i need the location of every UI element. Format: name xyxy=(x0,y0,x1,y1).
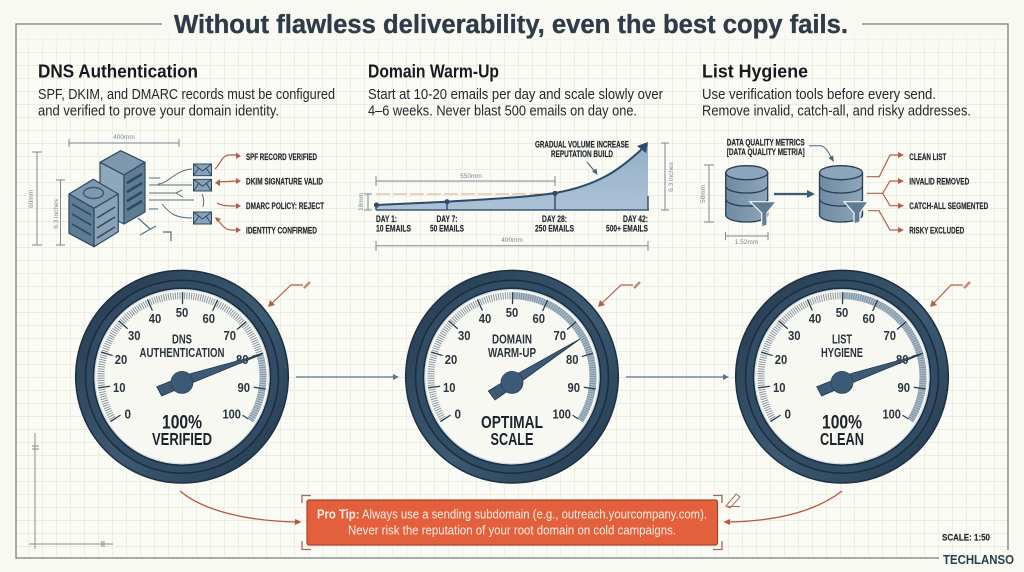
gauge title xyxy=(488,332,536,360)
curve xyxy=(376,147,644,205)
labels: server checks: SPF RECORD VERIFIED xyxy=(246,152,317,163)
scale numbers: 80 xyxy=(566,353,579,367)
gauge bezel xyxy=(406,270,618,483)
gauge value xyxy=(481,412,543,449)
dimension lines: chart: 550mm xyxy=(460,173,482,180)
scale numbers: 60 xyxy=(202,312,215,326)
chart annotation: REPUTATION BUILD xyxy=(551,149,613,160)
callout box xyxy=(307,500,718,545)
heading: DNS Authentication: DNS Authentication xyxy=(38,60,198,82)
icon: funnel left xyxy=(750,202,776,227)
needle xyxy=(157,354,262,396)
scale ticks xyxy=(431,296,593,420)
arrow: gauge 1 to gauge 2 xyxy=(296,374,399,380)
scale label: SCALE: 1:50 xyxy=(942,532,990,544)
gauge value: OPTIMAL xyxy=(481,412,543,432)
scale numbers: 0 xyxy=(454,408,461,422)
scale ticks xyxy=(761,296,923,420)
arrows: server checks xyxy=(215,152,241,233)
scale numbers xyxy=(113,306,250,422)
callout: pro tip xyxy=(302,494,740,550)
labels: hygiene outputs: INVALID REMOVED xyxy=(909,176,969,188)
scale numbers: 20 xyxy=(445,353,457,367)
scale numbers: 50 xyxy=(176,306,188,320)
arrowhead xyxy=(637,142,648,153)
day labels: 10 EMAILS xyxy=(376,224,411,234)
gauge title: DOMAIN xyxy=(492,333,532,347)
day labels: 250 EMAILS xyxy=(535,224,574,234)
labels: server checks: IDENTITY CONFIRMED xyxy=(246,226,317,236)
labels: hygiene outputs xyxy=(909,152,988,236)
dimension lines: database: 1.52mm xyxy=(735,239,758,246)
annotation: data quality metrics xyxy=(727,138,834,162)
labels: server checks: DMARC POLICY: REJECT xyxy=(246,201,324,212)
scale numbers: 40 xyxy=(809,312,821,326)
scale numbers: 100 xyxy=(882,408,901,422)
callout pointer: gauge 1 xyxy=(268,282,310,307)
gauge title: WARM-UP xyxy=(488,346,536,360)
scale numbers: 80 xyxy=(896,353,909,367)
curved arrow: gauge 1 to pro tip xyxy=(180,491,302,525)
dimension lines: chart: 18mm xyxy=(358,193,365,211)
dimension lines: server: 60mm xyxy=(28,190,35,208)
gauge value: 100% xyxy=(822,413,862,434)
heading: List Hygiene: List Hygiene xyxy=(702,60,808,82)
gauge value: CLEAN xyxy=(820,429,864,449)
arrow: gauge 2 to gauge 3 xyxy=(626,374,729,380)
panel: List hygiene text xyxy=(702,60,971,120)
scale numbers: 40 xyxy=(149,312,161,326)
title: Without flawless deliverability, even the best copy fails. xyxy=(174,11,848,39)
scale numbers: 70 xyxy=(883,329,896,343)
diagram: DNS servers and email checks xyxy=(28,134,324,247)
scale numbers: 30 xyxy=(128,329,141,343)
annotation: data quality metrics: [DATA QUALITY METRIA] xyxy=(727,147,805,158)
description: DNS Authentication xyxy=(38,87,335,120)
dimension lines: chart: 400mm xyxy=(501,237,523,244)
gauge value: VERIFIED xyxy=(152,429,212,449)
labels: server checks xyxy=(246,152,324,236)
scale numbers: 0 xyxy=(124,408,131,422)
arrows: hygiene outputs xyxy=(867,152,904,233)
gauge value: 100% xyxy=(162,413,202,434)
day labels: DAY 28: xyxy=(542,214,567,225)
gauge title: HYGIENE xyxy=(821,346,863,360)
data points xyxy=(374,191,558,208)
scale numbers: 10 xyxy=(443,381,456,395)
panel: Domain warm-up text xyxy=(368,60,663,120)
scale numbers: 30 xyxy=(788,329,801,343)
gauge title: LIST xyxy=(832,333,852,347)
heading: Domain Warm-Up: Domain Warm-Up xyxy=(368,60,499,82)
scale numbers: 100 xyxy=(552,408,571,422)
needle xyxy=(488,339,580,400)
scale numbers: 90 xyxy=(567,381,580,395)
dimension lines: database: 58mm xyxy=(700,185,707,203)
day labels xyxy=(376,214,648,234)
scale numbers: 60 xyxy=(862,312,875,326)
gauge value: SCALE xyxy=(490,429,534,449)
description: Domain Warm-Up xyxy=(368,87,663,120)
icon: clean database xyxy=(820,166,862,222)
scale numbers: 100 xyxy=(222,408,241,422)
description: List Hygiene: Use verification tools before every send. xyxy=(702,87,936,103)
dimension lines: database xyxy=(700,165,768,246)
scale numbers: 20 xyxy=(775,353,787,367)
gauge title xyxy=(140,332,224,360)
gauge: list hygiene xyxy=(736,270,948,483)
callout text: Never risk the reputation of your root domain on cold campaigns. xyxy=(348,522,676,538)
scale numbers: 0 xyxy=(784,408,791,422)
scale numbers: 50 xyxy=(506,306,518,320)
dimension lines: chart: 6.3 inches xyxy=(668,161,675,192)
gauge title xyxy=(821,332,863,360)
reference line xyxy=(376,193,555,195)
connectors: server to envelopes xyxy=(138,169,204,241)
icon: back server xyxy=(100,151,145,224)
description: List Hygiene: Remove invalid, catch-all, and risky addresses. xyxy=(702,104,971,120)
scale numbers: 90 xyxy=(237,381,250,395)
icon: envelope DKIM xyxy=(194,179,212,191)
chart annotation xyxy=(535,140,629,175)
description: Domain Warm-Up: Start at 10-20 emails per day and scale slowly over xyxy=(368,87,663,103)
corner brackets xyxy=(302,496,722,550)
scale numbers: 70 xyxy=(553,329,566,343)
day labels: 500+ EMAILS xyxy=(606,224,648,234)
needle xyxy=(817,354,921,396)
labels: hygiene outputs: CATCH-ALL SEGMENTED xyxy=(909,201,988,212)
scale numbers: 60 xyxy=(532,312,545,326)
panel: DNS authentication text xyxy=(38,60,335,120)
scale numbers: 80 xyxy=(236,353,249,367)
area under curve xyxy=(376,143,648,210)
callout pointer: gauge 3 xyxy=(930,282,970,307)
drafting marks: lower left xyxy=(29,433,113,549)
icon: pencil xyxy=(726,494,740,508)
labels: hygiene outputs: RISKY EXCLUDED xyxy=(909,226,964,236)
icon: source database xyxy=(726,166,768,222)
description: DNS Authentication: and verified to prove your domain identity. xyxy=(38,104,279,120)
dimension lines: server: 6.3 inches xyxy=(53,198,60,229)
day labels: DAY 42: xyxy=(623,214,648,225)
scale numbers: 70 xyxy=(223,329,236,343)
callout text: Pro Tip: Always use a sending subdomain (e.g., outreach.yourcompany.com). xyxy=(317,507,707,522)
gauge value xyxy=(152,413,212,449)
gauge bezel xyxy=(736,270,948,483)
gauge title: DNS xyxy=(172,333,192,347)
logo: TECHLANSO xyxy=(943,552,1014,567)
arrow: database to database xyxy=(774,190,815,198)
scale ticks xyxy=(101,296,263,420)
day labels: DAY 1: xyxy=(376,214,397,225)
icon: envelope identity xyxy=(194,212,212,224)
scale numbers xyxy=(773,306,910,422)
scale numbers: 30 xyxy=(458,329,471,343)
day labels: DAY 7: xyxy=(436,214,458,225)
chart: domain warm-up volume curve xyxy=(358,140,675,251)
gauge: domain warm-up xyxy=(406,270,618,483)
gauge: DNS authentication xyxy=(76,270,288,483)
scale numbers: 50 xyxy=(836,306,848,320)
icon: funnel right xyxy=(844,202,868,224)
callout pointer: gauge 2 xyxy=(598,282,640,307)
dimension lines: server xyxy=(28,134,179,245)
labels: hygiene outputs: CLEAN LIST xyxy=(909,152,946,163)
gauge title: AUTHENTICATION xyxy=(140,346,224,360)
labels: server checks: DKIM SIGNATURE VALID xyxy=(246,176,323,188)
scale numbers: 40 xyxy=(479,312,491,326)
baseline and drop lines xyxy=(376,193,649,210)
callout text xyxy=(317,507,707,538)
description: List Hygiene xyxy=(702,87,971,120)
icon: front server xyxy=(69,179,118,247)
chart annotation: GRADUAL VOLUME INCREASE xyxy=(535,140,629,150)
annotation: data quality metrics: DATA QUALITY METRICS xyxy=(727,138,805,148)
description: DNS Authentication: SPF, DKIM, and DMARC records must be configured xyxy=(38,87,335,103)
diagram: list hygiene databases xyxy=(700,138,988,246)
icon: envelope SPF xyxy=(194,164,212,176)
scale numbers: 90 xyxy=(897,381,910,395)
day labels: 50 EMAILS xyxy=(430,224,464,234)
scale numbers: 20 xyxy=(115,353,127,367)
dimension lines: chart xyxy=(358,143,675,251)
dimension lines: server: 400mm xyxy=(113,134,135,141)
curved arrow: gauge 3 to pro tip xyxy=(724,491,842,525)
gauge value xyxy=(820,413,864,449)
scale numbers xyxy=(443,306,580,422)
description: Domain Warm-Up: 4–6 weeks. Never blast 500 emails on day one. xyxy=(368,104,637,120)
scale numbers: 10 xyxy=(773,381,786,395)
gauge bezel xyxy=(76,270,288,483)
scale numbers: 10 xyxy=(113,381,126,395)
